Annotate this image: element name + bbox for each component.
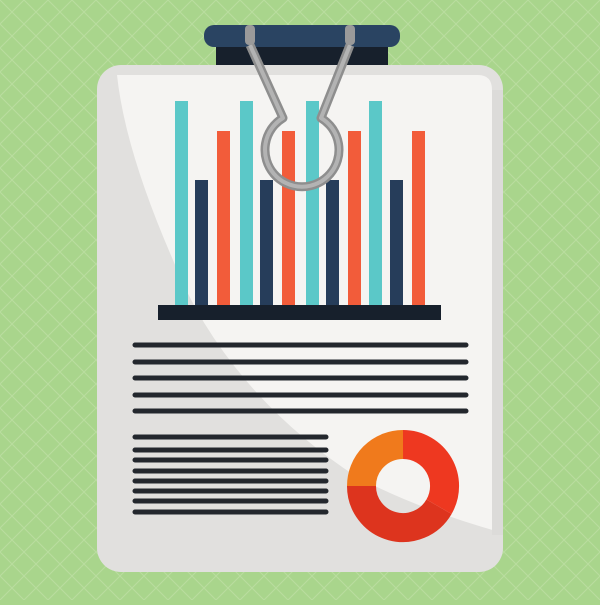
binder clip [204, 25, 400, 187]
bar chart [158, 101, 441, 320]
text lines [135, 345, 466, 512]
donut chart [361, 444, 445, 528]
clip back [216, 40, 388, 66]
paper [97, 65, 503, 572]
